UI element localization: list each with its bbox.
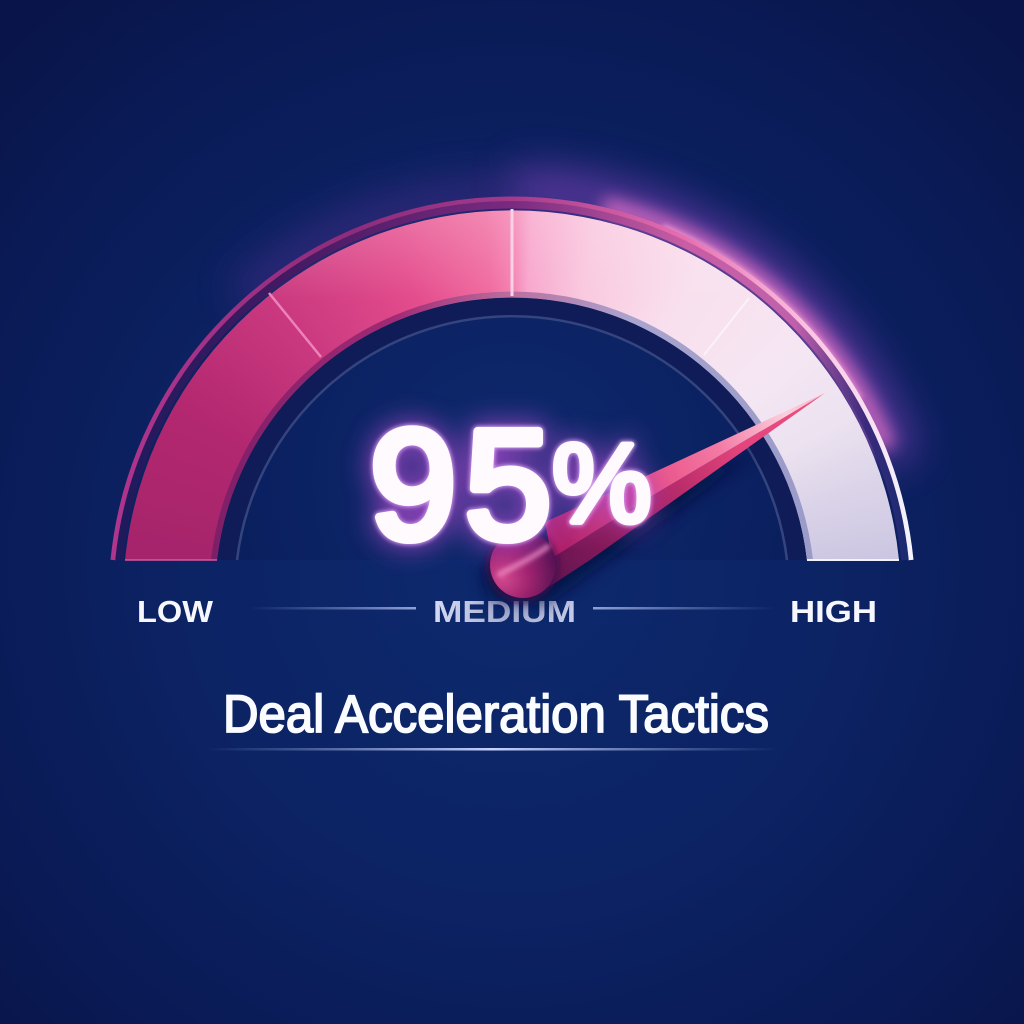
label: low: LOW bbox=[137, 594, 214, 629]
scale line: right bbox=[593, 607, 775, 610]
value glow: % bbox=[552, 421, 652, 546]
scale labels bbox=[137, 594, 877, 629]
label: high: HIGH bbox=[790, 594, 877, 629]
title underline bbox=[205, 748, 780, 750]
inner dial face bbox=[236, 315, 788, 560]
title: Deal Acceleration Tactics bbox=[223, 685, 769, 744]
tick: centre bbox=[510, 209, 514, 296]
percent sign: % bbox=[552, 421, 652, 546]
value glow: % bbox=[552, 421, 652, 546]
band bottom edge bbox=[125, 559, 899, 561]
gauge value bbox=[370, 398, 652, 571]
value glow bbox=[370, 398, 652, 571]
gap between ring and band bbox=[119, 205, 905, 560]
needle bbox=[480, 393, 825, 606]
needle upper facet bbox=[545, 393, 825, 558]
inner bevel bbox=[214, 295, 810, 560]
label: medium: MEDIUM bbox=[433, 594, 576, 629]
needle lower facet bbox=[538, 393, 825, 594]
hub bbox=[485, 529, 559, 603]
value glow: 95 bbox=[370, 398, 551, 571]
value text: 95 bbox=[370, 398, 551, 571]
tick: right bbox=[704, 298, 749, 355]
inner thin ring bbox=[237, 316, 787, 560]
tick: left bbox=[269, 293, 321, 357]
glow behind gauge bbox=[241, 190, 897, 460]
gauge bbox=[110, 146, 932, 561]
gauge band bbox=[125, 210, 899, 560]
inner dial area bbox=[217, 297, 807, 560]
value glow: 95 bbox=[370, 398, 551, 571]
needle shadow bbox=[480, 450, 760, 606]
scale line: left bbox=[250, 607, 416, 610]
outer thin ring bbox=[113, 199, 911, 560]
